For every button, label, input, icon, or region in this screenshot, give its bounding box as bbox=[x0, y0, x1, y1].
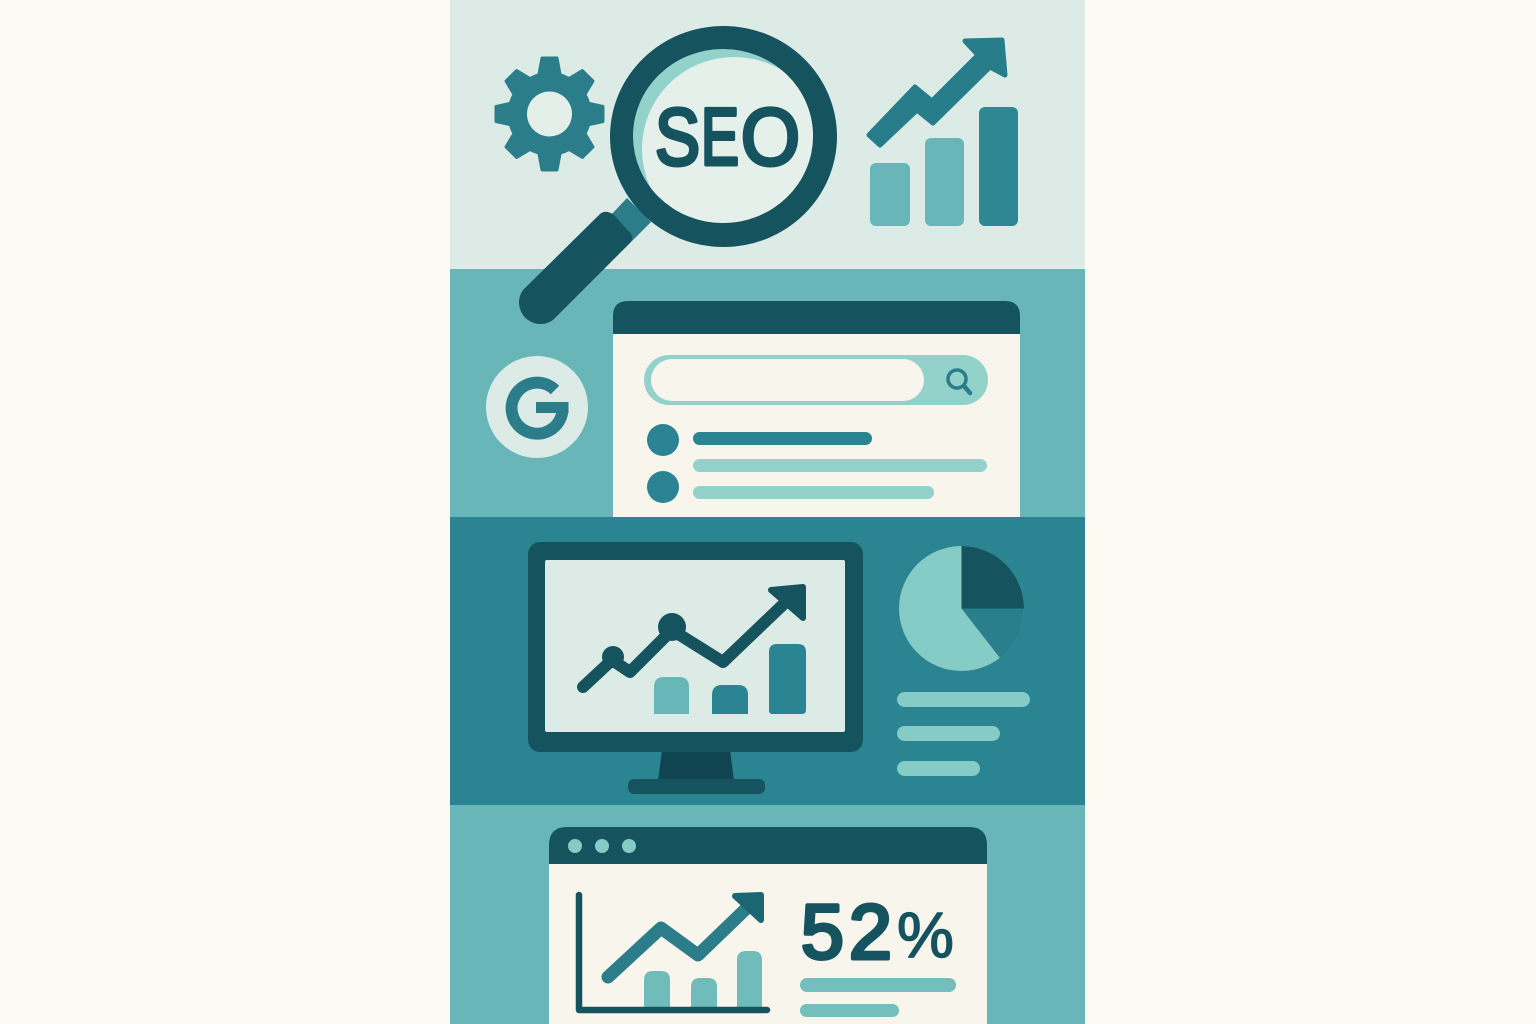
text: 52%: 5 bbox=[801, 890, 844, 976]
icon: desktop monitor with chart bbox=[528, 542, 863, 794]
legend lines bbox=[897, 692, 1030, 776]
search result 1 bbox=[647, 424, 987, 472]
text placeholder lines bbox=[800, 978, 956, 1017]
icon: Google badge bbox=[486, 356, 588, 458]
text: 52%: % bbox=[897, 899, 954, 971]
text: SEO: O bbox=[741, 92, 800, 182]
browser title bar with dots bbox=[549, 827, 987, 864]
search result 2 bbox=[647, 471, 934, 503]
panel: band 4 background bbox=[450, 805, 1085, 1024]
icon: gear bbox=[496, 58, 603, 170]
panel: analytics browser window bbox=[549, 827, 987, 1024]
search bar bbox=[644, 355, 988, 405]
text: SEO: E bbox=[701, 92, 739, 182]
icon: growth arrow with bars bbox=[869, 40, 1018, 226]
panel: band 1 background bbox=[450, 0, 1085, 269]
panel: band 3 background bbox=[450, 517, 1085, 805]
line and bar chart bbox=[579, 895, 767, 1010]
text: 52%: 2 bbox=[849, 890, 892, 976]
panel: search browser window bbox=[613, 301, 1020, 517]
pie chart bbox=[899, 546, 1024, 671]
text: SEO: S bbox=[655, 92, 700, 182]
icon: magnifying glass with SEO bbox=[519, 26, 837, 324]
browser title bar bbox=[613, 301, 1020, 334]
panel: band 2 background bbox=[450, 269, 1085, 517]
